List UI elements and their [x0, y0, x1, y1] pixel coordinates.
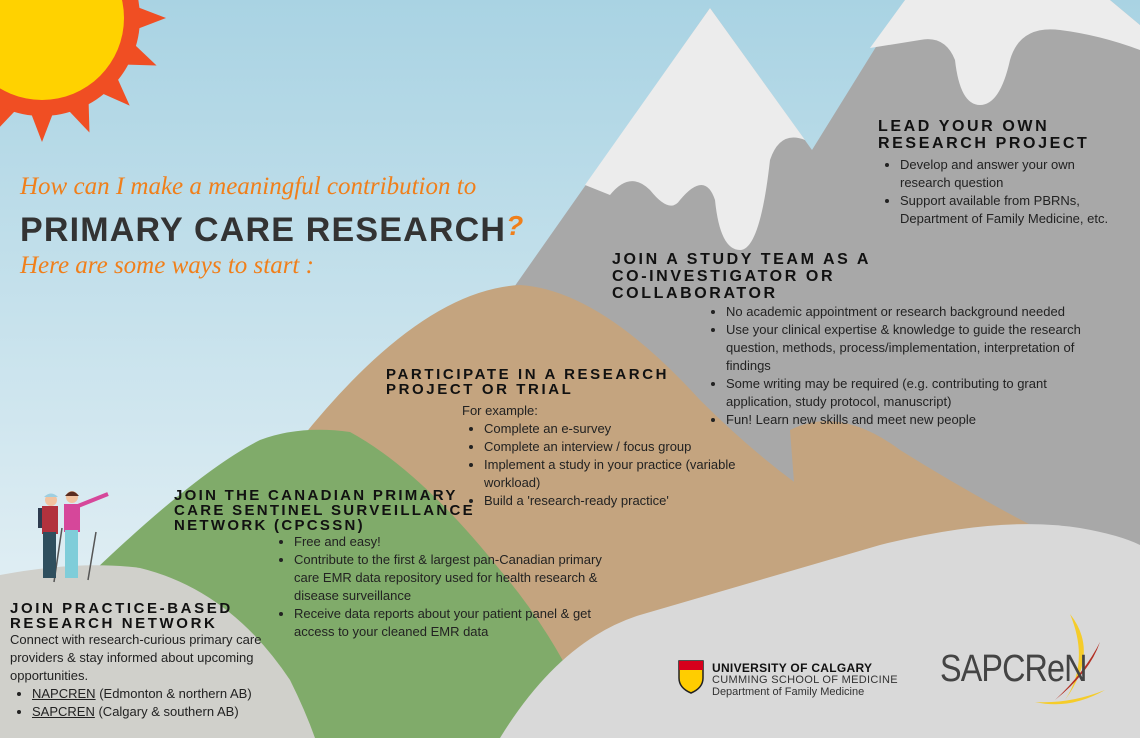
- grey hill left: [0, 565, 315, 738]
- list: [885, 157, 1108, 226]
- heading: [174, 487, 475, 534]
- heading: JOIN PRACTICE-BASED: [10, 600, 233, 617]
- list: [279, 534, 602, 639]
- heading: CO-INVESTIGATOR OR: [612, 268, 835, 285]
- tan mountain small right: [790, 421, 1060, 560]
- icon: crest: [678, 660, 704, 694]
- text: Complete an e-survey: [484, 421, 611, 436]
- logo: SAPCReN: SAPCReN: [940, 648, 1087, 690]
- text: Implement a study in your practice (variable workload): [484, 457, 735, 490]
- panel: practice-based research network: [10, 600, 261, 719]
- heading: [386, 366, 669, 398]
- logo: University of Calgary: UNIVERSITY OF CALGARY: [712, 661, 872, 675]
- sun: [0, 0, 166, 142]
- text: Complete an interview / focus group: [484, 439, 691, 454]
- icon: hikers: [38, 491, 109, 582]
- list: Some writing may be required (e.g. contributing to grant application, study protocol, manuscript): [726, 376, 1047, 409]
- heading: LEAD YOUR OWN: [878, 118, 1049, 135]
- main title: PRIMARY CARE RESEARCH?: [20, 210, 523, 249]
- text: NAPCREN (Edmonton & northern AB): [32, 686, 252, 701]
- list: No academic appointment or research background needed: [726, 304, 1065, 319]
- heading: PROJECT OR TRIAL: [386, 381, 573, 398]
- title block: [20, 173, 523, 279]
- heading: [878, 118, 1089, 152]
- panel: participate: [386, 366, 735, 508]
- panel: study team: [612, 251, 1081, 427]
- title line 1: How can I make a meaningful contribution to: [20, 173, 476, 200]
- panel: lead own project: [878, 118, 1108, 226]
- list: Support available from PBRNs, Department of Family Medicine, etc.: [900, 193, 1108, 226]
- heading: [10, 600, 233, 632]
- heading: RESEARCH PROJECT: [878, 135, 1089, 152]
- text: [462, 403, 735, 508]
- list: Fun! Learn new skills and meet new people: [726, 412, 976, 427]
- text: [10, 632, 261, 719]
- text: For example:: [462, 403, 538, 418]
- heading: [612, 251, 871, 302]
- list: Receive data reports about your patient panel & get access to your cleaned EMR data: [294, 606, 591, 639]
- list: Free and easy!: [294, 534, 381, 549]
- text: Build a 'research-ready practice': [484, 493, 669, 508]
- text: SAPCREN (Calgary & southern AB): [32, 704, 239, 719]
- list: Contribute to the first & largest pan-Canadian primary care EMR data repository used for health research & disease surveillance: [294, 552, 602, 603]
- grey mountains: [505, 0, 1140, 738]
- panel: CPCSSN: [174, 487, 602, 639]
- list: [711, 304, 1081, 427]
- list: Use your clinical expertise & knowledge to guide the research question, methods, process/implementation, interpretation of findings: [726, 322, 1081, 373]
- logo: SAPCReN: [940, 614, 1105, 704]
- title line 3: Here are some ways to start :: [20, 252, 314, 279]
- logo: University of Calgary: [678, 660, 898, 698]
- snow caps: [585, 8, 805, 250]
- heading: JOIN THE CANADIAN PRIMARY: [174, 487, 458, 504]
- text: Connect with research-curious primary care providers & stay informed about upcoming opportunities.: [10, 632, 261, 683]
- heading: PARTICIPATE IN A RESEARCH: [386, 366, 669, 383]
- grey hill right: [500, 524, 1140, 738]
- green hill: [95, 430, 600, 738]
- heading: NETWORK (CPCSSN): [174, 517, 365, 534]
- heading: RESEARCH NETWORK: [10, 615, 217, 632]
- heading: COLLABORATOR: [612, 285, 778, 302]
- heading: JOIN A STUDY TEAM AS A: [612, 251, 871, 268]
- tan mountain: [300, 285, 900, 738]
- list: Develop and answer your own research question: [900, 157, 1075, 190]
- logo: University of Calgary: CUMMING SCHOOL OF MEDICINE: [712, 674, 898, 686]
- logo: University of Calgary: Department of Family Medicine: [712, 686, 864, 698]
- heading: CARE SENTINEL SURVEILLANCE: [174, 502, 475, 519]
